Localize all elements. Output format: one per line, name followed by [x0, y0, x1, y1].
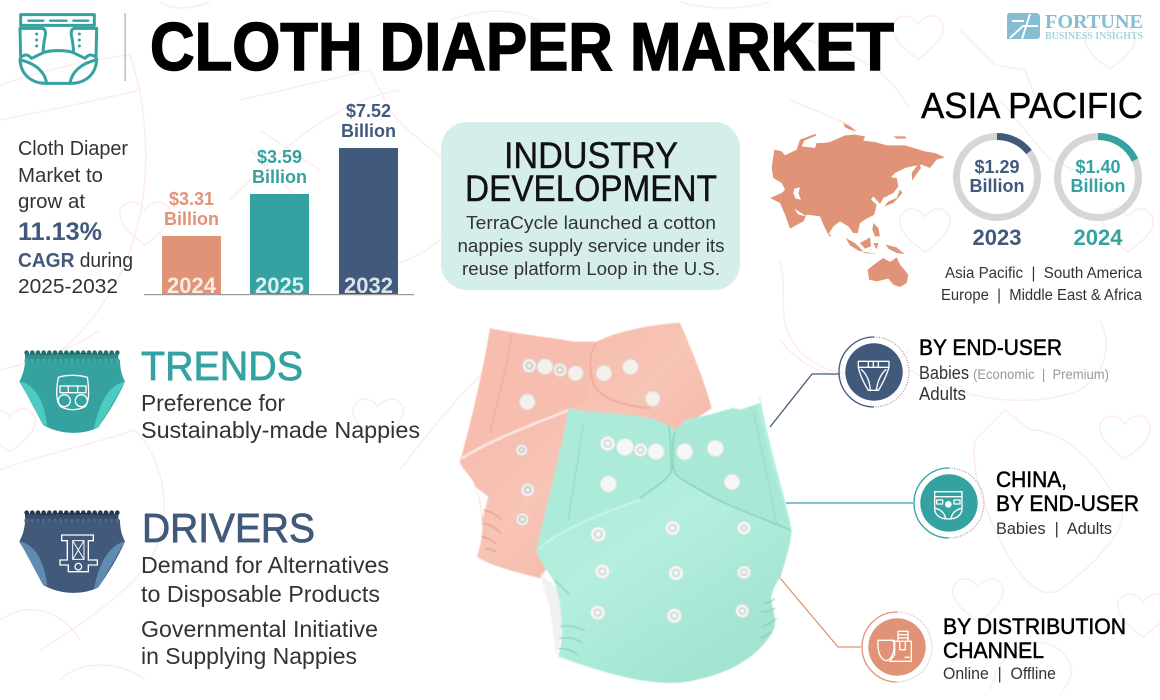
panel: industry development: reuse platform Loop in the U.S.: [462, 258, 720, 279]
donut: 2023: [956, 136, 1038, 250]
text: CAGR summary: CAGR during: [18, 249, 133, 272]
text: drivers detail: [141, 552, 389, 669]
bar chart: [144, 101, 414, 298]
heading: Asia Pacific: ASIA PACIFIC: [921, 85, 1143, 126]
icon: by distribution channel: [862, 612, 932, 682]
logo: Fortune Business Insights: [1007, 11, 1143, 42]
text: trends detail: Sustainably-made Nappies: [141, 417, 420, 443]
bar 2024: $3.31: [169, 189, 214, 209]
text: drivers detail: in Supplying Nappies: [141, 643, 357, 669]
text: by end-user: (Economic | Premium): [973, 367, 1109, 382]
donut: 2024: $1.40: [1075, 157, 1121, 177]
panel: industry development: INDUSTRY: [504, 135, 678, 176]
map: Asia Pacific: [770, 123, 945, 287]
text: regions: Europe | Middle East & Africa: [941, 287, 1142, 304]
text: by end-user: Babies: [919, 363, 969, 383]
text: CAGR summary: 11.13%: [18, 218, 102, 246]
text: by distribution channel: Online | Offline: [943, 664, 1056, 683]
heading: drivers: DRIVERS: [142, 505, 315, 551]
panel: industry development: DEVELOPMENT: [465, 168, 717, 209]
heading: trends: TRENDS: [141, 343, 303, 389]
donut: 2024: 2024: [1074, 225, 1123, 250]
donut: 2024: Billion: [1070, 176, 1126, 196]
text: by end-user: BY END-USER: [919, 335, 1062, 360]
text: by end-user: Adults: [919, 384, 966, 404]
bar 2032: 2032: [344, 273, 393, 298]
logo: Fortune Business Insights: FORTUNE: [1045, 11, 1143, 33]
icon: drivers diaper: [19, 513, 125, 593]
text: regions: Asia Pacific | South America: [945, 265, 1142, 282]
bar 2024: 2024: [167, 273, 217, 298]
illustration: pink and mint cloth diapers: [460, 323, 792, 683]
icon: by end-user: [839, 337, 909, 407]
donut: 2023: 2023: [973, 225, 1021, 250]
mint diaper: [537, 397, 792, 683]
bar 2025: $3.59: [257, 147, 302, 167]
text: CAGR summary: [18, 137, 133, 298]
bar 2032: [339, 101, 398, 298]
bar 2025: [250, 147, 309, 298]
bar 2025: 2025: [255, 273, 304, 298]
panel: industry development: [441, 122, 740, 290]
bar 2024: Billion: [164, 209, 219, 229]
donut: 2023: $1.29: [974, 157, 1020, 177]
panel: industry development: TerraCycle launched a cotton: [466, 212, 716, 233]
bar 2025: Billion: [252, 167, 307, 187]
text: drivers detail: Governmental Initiative: [141, 616, 378, 642]
text: regions: [941, 265, 1142, 304]
text: CAGR summary: 2025-2032: [18, 275, 118, 298]
text: drivers detail: Demand for Alternatives: [141, 552, 389, 578]
text: by distribution channel: BY DISTRIBUTION: [943, 614, 1126, 639]
text: by distribution channel: [943, 614, 1126, 683]
text: CAGR summary: grow at: [18, 190, 85, 213]
icon: trends diaper: [19, 353, 125, 433]
bar 2024: [162, 189, 221, 298]
panel: industry development: nappies supply service under its: [458, 235, 724, 256]
donut: 2024: [1058, 136, 1138, 250]
title: CLOTH DIAPER MARKET: [150, 9, 894, 85]
text: trends detail: [141, 390, 420, 443]
text: drivers detail: to Disposable Products: [141, 581, 380, 607]
pink diaper: [460, 323, 712, 578]
icon: cloth diaper outline logo: [20, 15, 97, 83]
bar 2032: Billion: [341, 121, 396, 141]
text: china by end-user: CHINA,: [996, 467, 1067, 492]
text: by end-user: [919, 335, 1109, 404]
bar 2032: $7.52: [346, 101, 391, 121]
text: by distribution channel: CHANNEL: [943, 638, 1044, 663]
icon: china by end-user: [914, 468, 984, 538]
donut: 2023: Billion: [970, 176, 1024, 196]
text: CAGR summary: Market to: [18, 164, 103, 187]
text: china by end-user: [996, 467, 1139, 538]
logo: Fortune Business Insights: BUSINESS INSIGHTS: [1045, 31, 1143, 42]
text: trends detail: Preference for: [141, 390, 285, 416]
connector lines: [770, 374, 913, 647]
text: CAGR summary: Cloth Diaper: [18, 137, 128, 160]
divider: [124, 13, 126, 81]
text: china by end-user: BY END-USER: [996, 491, 1139, 516]
text: china by end-user: Babies | Adults: [996, 519, 1112, 538]
